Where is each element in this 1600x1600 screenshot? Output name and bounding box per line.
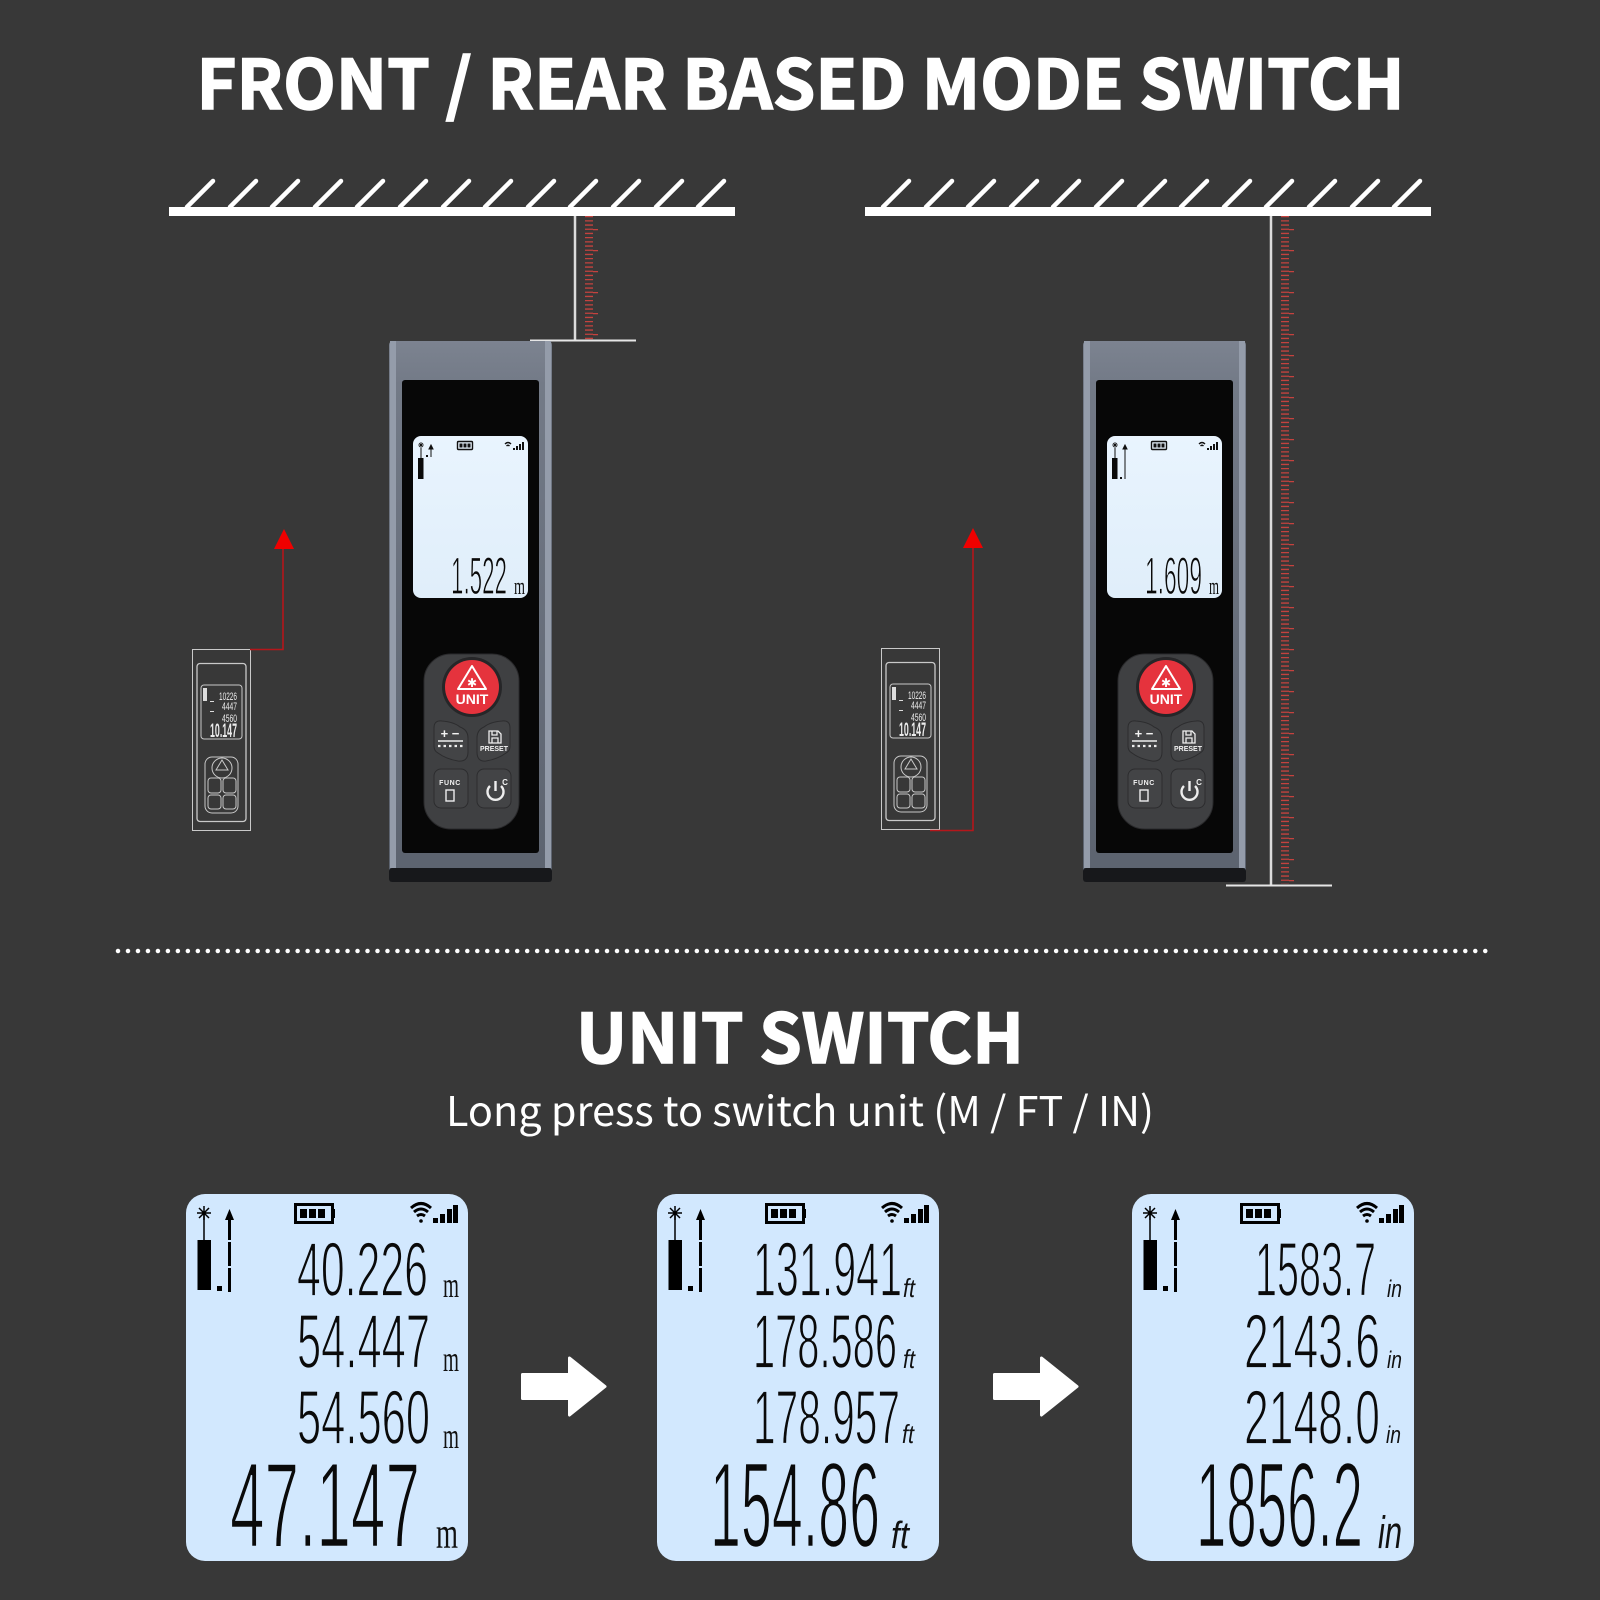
panel: LCD metres: 54.560 bbox=[297, 1375, 430, 1461]
ceiling right bbox=[865, 181, 1431, 216]
unit button: ✱ bbox=[1161, 676, 1171, 690]
panel: LCD inches: in bbox=[1386, 1422, 1401, 1449]
panel: LCD feet: ft bbox=[903, 1344, 916, 1374]
status icons bbox=[197, 1204, 458, 1292]
panel: LCD inches: in bbox=[1387, 1276, 1402, 1303]
arrow: m to ft bbox=[522, 1358, 605, 1415]
readings: 40.226 bbox=[297, 1227, 428, 1313]
mini screen text bbox=[203, 688, 237, 742]
device screen: m bbox=[1209, 574, 1219, 600]
unit button bbox=[445, 660, 499, 714]
mini screen text: 10226 bbox=[219, 691, 237, 703]
panel: LCD metres bbox=[186, 1194, 468, 1573]
mini device outline: 10.147 bbox=[210, 721, 237, 742]
panel: front based measurement bbox=[169, 181, 735, 882]
panel: LCD inches: 2143.6 bbox=[1244, 1299, 1380, 1385]
keypad: + − bbox=[441, 726, 460, 741]
ceiling left bbox=[169, 181, 735, 216]
readings: 131.941 bbox=[753, 1227, 902, 1313]
device screen bbox=[413, 436, 528, 606]
mini device outline bbox=[882, 648, 940, 830]
keypad: PRESET bbox=[480, 746, 509, 753]
device screen: 1.609 bbox=[1145, 547, 1202, 606]
mini device outline bbox=[192, 650, 250, 830]
panel: LCD feet bbox=[657, 1194, 939, 1573]
keypad: C bbox=[502, 778, 508, 787]
mini device outline: 10.147 bbox=[899, 720, 926, 741]
keypad: C bbox=[1196, 778, 1202, 787]
panel: LCD feet: ft bbox=[902, 1419, 915, 1449]
subheading: Long press to switch unit (M / FT / IN) bbox=[446, 1078, 1154, 1138]
panel: LCD metres: m bbox=[443, 1416, 459, 1456]
panel: LCD inches: in bbox=[1387, 1347, 1402, 1374]
unit button: ✱ bbox=[467, 676, 477, 690]
panel: LCD feet: 178.957 bbox=[753, 1375, 900, 1461]
panel: LCD inches: 1856.2 bbox=[1196, 1437, 1363, 1573]
keypad bbox=[1118, 654, 1213, 829]
rear measuring ruler bbox=[1226, 216, 1332, 886]
device: rear mode bbox=[1083, 341, 1246, 882]
unit button: UNIT bbox=[456, 691, 489, 707]
mini screen text: 4560 bbox=[911, 712, 926, 724]
keypad: FUNC bbox=[439, 780, 461, 787]
status icons bbox=[668, 1204, 929, 1292]
device screen bbox=[1107, 436, 1222, 606]
device screen: m bbox=[514, 574, 525, 600]
title: FRONT / REAR BASED MODE SWITCH bbox=[196, 30, 1404, 129]
keypad: PRESET bbox=[1174, 746, 1203, 753]
panel: LCD metres: m bbox=[443, 1339, 459, 1379]
mini screen text: 4447 bbox=[222, 701, 237, 713]
panel: rear based measurement bbox=[865, 181, 1431, 886]
front measuring ruler bbox=[530, 216, 636, 342]
panel: LCD feet: 178.586 bbox=[753, 1299, 897, 1385]
panel: LCD inches bbox=[1132, 1194, 1414, 1573]
panel: LCD metres: m bbox=[443, 1265, 459, 1305]
unit button bbox=[1139, 660, 1193, 714]
panel: LCD inches: 2148.0 bbox=[1244, 1375, 1380, 1461]
arrow: ft to in bbox=[994, 1358, 1077, 1415]
keypad: FUNC bbox=[1133, 780, 1155, 787]
panel: LCD metres: 54.447 bbox=[297, 1299, 430, 1385]
status icons bbox=[1143, 1204, 1404, 1292]
unit button: UNIT bbox=[1150, 691, 1183, 707]
device: front mode bbox=[389, 341, 552, 882]
panel: LCD metres: 47.147 bbox=[230, 1437, 420, 1573]
mini screen text: 10226 bbox=[908, 690, 926, 702]
readings: 1583.7 bbox=[1255, 1227, 1376, 1313]
panel: LCD feet: ft bbox=[903, 1273, 916, 1303]
mini screen text: 4447 bbox=[911, 700, 926, 712]
mini screen text: 4560 bbox=[222, 713, 237, 725]
mini screen text bbox=[892, 687, 926, 741]
panel: LCD feet: 154.86 bbox=[710, 1437, 880, 1573]
panel: LCD inches: in bbox=[1378, 1507, 1402, 1558]
red arrow: rear reference bbox=[930, 528, 983, 830]
keypad: + − bbox=[1135, 726, 1154, 741]
panel: LCD metres: m bbox=[436, 1509, 458, 1558]
panel: LCD feet: ft bbox=[891, 1515, 910, 1557]
device screen: 1.522 bbox=[451, 547, 507, 606]
keypad bbox=[424, 654, 519, 829]
red arrow: front reference bbox=[250, 529, 294, 650]
heading: unit switch: UNIT SWITCH bbox=[576, 984, 1024, 1083]
